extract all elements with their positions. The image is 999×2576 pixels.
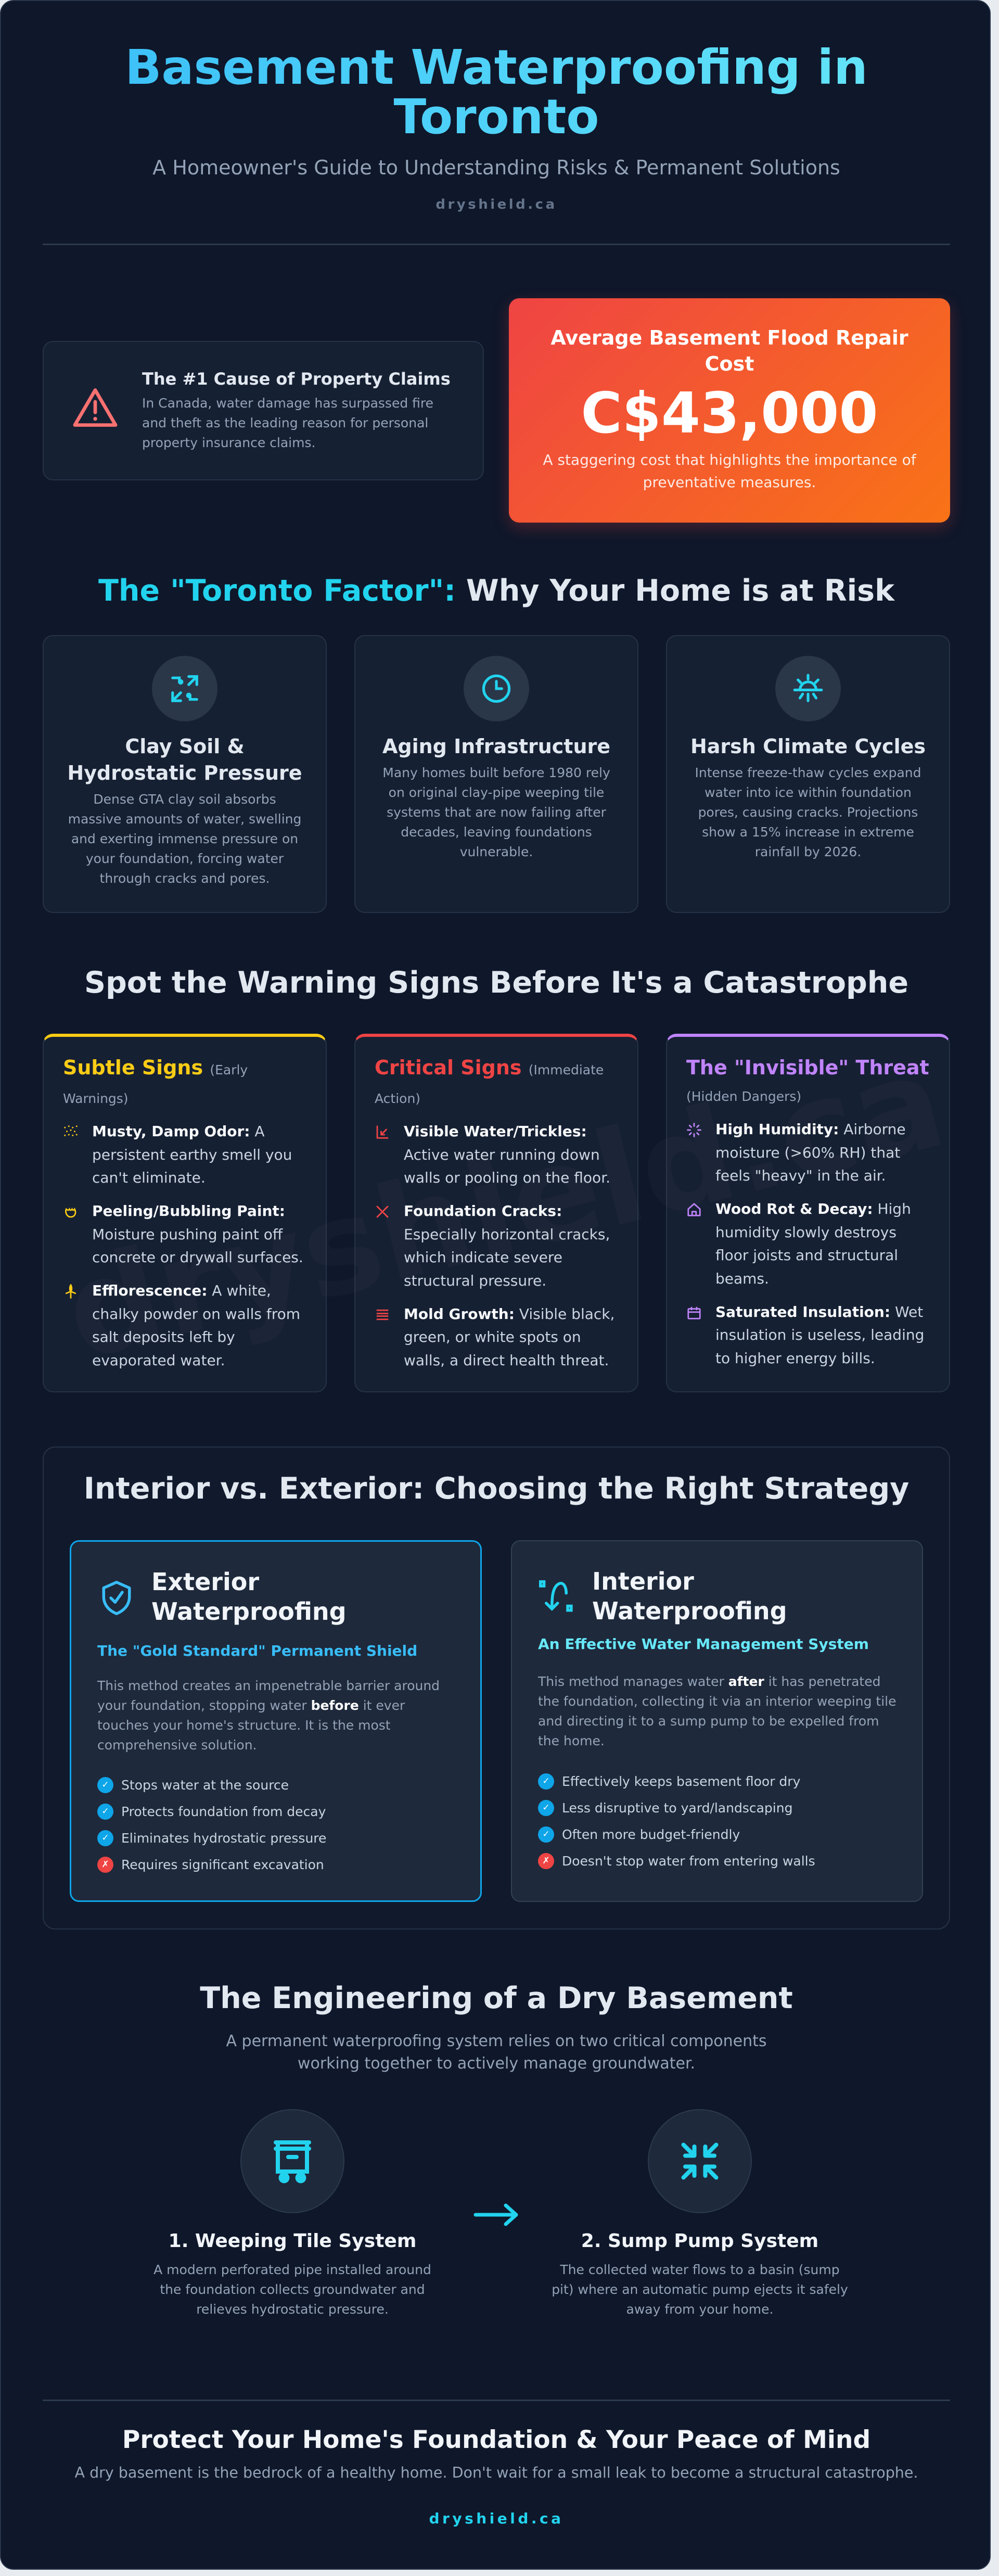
pros/cons list: ✓ bbox=[101, 1780, 109, 1790]
heading: engineering: The Engineering of a Dry Basement bbox=[200, 1981, 793, 2015]
card: exterior: Exterior bbox=[151, 1568, 259, 1596]
pros/cons list: Stops water at the source bbox=[121, 1778, 289, 1793]
card: interior: An Effective Water Management System bbox=[538, 1635, 869, 1653]
pros/cons list bbox=[97, 1777, 326, 1873]
big number: C$43,000 bbox=[581, 381, 878, 446]
panel: invisible threat: High Humidity: Airborne moisture (>60% RH) that feels "heavy" in the air. bbox=[715, 1121, 906, 1184]
pros/cons list: Eliminates hydrostatic pressure bbox=[121, 1831, 326, 1846]
panel: clay soil: Clay Soil & Hydrostatic Pressure bbox=[67, 735, 302, 784]
panel: invisible threat: The "Invisible" Threat bbox=[686, 1056, 929, 1079]
panel: clay soil: Dense GTA clay soil absorbs massive amounts of water, swelling and exerting immense pressure on your foundation, forcing water through cracks and pores. bbox=[68, 792, 301, 886]
footer heading: Protect Your Home's Foundation & Your Peace of Mind bbox=[122, 2426, 870, 2454]
footer brand: dryshield.ca bbox=[429, 2510, 564, 2527]
pros/cons list: ✗ bbox=[101, 1859, 109, 1870]
card: interior: Waterproofing bbox=[592, 1597, 787, 1625]
panel: interior vs exterior bbox=[43, 1446, 950, 1930]
watermark: dryshield.ca bbox=[51, 1025, 958, 1389]
card: interior: Often more budget-friendly bbox=[562, 1827, 740, 1842]
pros/cons list: ✓ bbox=[101, 1806, 109, 1817]
stat text: In Canada, water damage has surpassed fire and theft as the leading reason for personal property insurance claims. bbox=[142, 396, 433, 450]
title: Toronto bbox=[393, 89, 599, 145]
panel: aging infrastructure: Many homes built before 1980 rely on original clay-pipe weeping tile systems that are now failing after decades, leaving foundations vulnerable. bbox=[382, 765, 610, 859]
panel: invisible threat bbox=[666, 1034, 950, 1392]
card: interior: Doesn't stop water from entering walls bbox=[562, 1854, 815, 1869]
arrow bbox=[473, 2204, 518, 2226]
stat card: repair cost: Average Basement Flood Repair Cost bbox=[550, 326, 908, 375]
panel: critical signs: Mold Growth: Visible black, green, or white spots on walls, a direct health threat. bbox=[404, 1305, 614, 1369]
stat card: #1 cause bbox=[43, 341, 484, 480]
card: exterior: This method creates an impenetrable barrier around your foundation, stopping water before it ever touches your home's structure. It is the most comprehensive solution. bbox=[97, 1678, 440, 1753]
panel: subtle signs: Peeling/Bubbling Paint: Moisture pushing paint off concrete or drywall surfaces. bbox=[92, 1202, 303, 1266]
brand: dryshield.ca bbox=[436, 197, 557, 212]
step: sump pump: 2. Sump Pump System bbox=[581, 2230, 818, 2252]
panel: clay soil bbox=[43, 635, 327, 913]
engineering intro: A permanent waterproofing system relies on two critical components working together to actively manage groundwater. bbox=[226, 2032, 767, 2073]
card: interior bbox=[511, 1540, 923, 1902]
pros/cons list: Protects foundation from decay bbox=[121, 1804, 326, 1819]
card: interior: ✓ bbox=[542, 1803, 550, 1813]
panel: invisible threat: Wood Rot & Decay: High humidity slowly destroys floor joists and structural beams. bbox=[715, 1200, 911, 1287]
panel: subtle signs: Efflorescence: A white, chalky powder on walls from salt deposits left by evaporated water. bbox=[92, 1282, 300, 1369]
panel: climate bbox=[666, 635, 950, 913]
card: interior: Less disruptive to yard/landscaping bbox=[562, 1800, 792, 1816]
panel: critical signs: Critical Signs (Immediate Action) bbox=[375, 1056, 604, 1106]
panel: subtle signs bbox=[43, 1034, 327, 1392]
panel: climate: Harsh Climate Cycles bbox=[690, 735, 926, 758]
card: interior: This method manages water after it has penetrated the foundation, collecting it via an interior weeping tile and directing it to a sump pump to be expelled from the home. bbox=[538, 1674, 896, 1748]
step: sump pump: The collected water flows to a basin (sump pit) where an automatic pump ejects it safely away from your home. bbox=[552, 2262, 848, 2317]
step: sump pump bbox=[552, 2109, 848, 2317]
pros/cons list: Requires significant excavation bbox=[121, 1857, 324, 1872]
step: weeping tile: 1. Weeping Tile System bbox=[169, 2230, 416, 2252]
panel: subtle signs: Musty, Damp Odor: A persistent earthy smell you can't eliminate. bbox=[92, 1123, 292, 1186]
card: exterior: The "Gold Standard" Permanent Shield bbox=[97, 1642, 417, 1659]
footer text: A dry basement is the bedrock of a healthy home. Don't wait for a small leak to become a structural catastrophe. bbox=[75, 2464, 918, 2481]
stat card: repair cost: A staggering cost that highlights the importance of preventative measures. bbox=[543, 451, 916, 491]
panel: aging infrastructure bbox=[354, 635, 638, 913]
stat text bbox=[142, 369, 451, 450]
panel: subtle signs: Subtle Signs (Early Warnings) bbox=[63, 1056, 248, 1106]
card: interior: ✗ bbox=[542, 1856, 550, 1866]
stat text: The #1 Cause of Property Claims bbox=[142, 369, 451, 389]
panel: aging infrastructure: Aging Infrastructure bbox=[382, 735, 610, 758]
card: interior: ✓ bbox=[542, 1776, 550, 1786]
step: weeping tile bbox=[153, 2109, 431, 2317]
panel: invisible threat: (Hidden Dangers) bbox=[686, 1089, 801, 1104]
heading: Interior vs. Exterior: Choosing the Right Strategy bbox=[84, 1471, 909, 1506]
stat card: repair cost bbox=[509, 298, 950, 523]
icon: water flow bbox=[539, 1580, 573, 1611]
card: interior: ✓ bbox=[542, 1829, 550, 1839]
title: Basement Waterproofing in bbox=[125, 40, 868, 95]
panel: critical signs: Foundation Cracks: Especially horizontal cracks, which indicate severe structural pressure. bbox=[404, 1202, 610, 1289]
subtitle: A Homeowner's Guide to Understanding Risks & Permanent Solutions bbox=[152, 156, 840, 179]
card: interior: Effectively keeps basement floor dry bbox=[562, 1774, 800, 1789]
title bbox=[22, 43, 971, 142]
step: weeping tile: A modern perforated pipe installed around the foundation collects groundwater and relieves hydrostatic pressure. bbox=[153, 2262, 431, 2317]
icon: shield bbox=[102, 1581, 131, 1615]
card: interior: Interior bbox=[592, 1567, 694, 1595]
panel: critical signs: Visible Water/Trickles: Active water running down walls or pooling on the floor. bbox=[404, 1123, 610, 1186]
heading: toronto factor: The "Toronto Factor": Why Your Home is at Risk bbox=[98, 574, 894, 608]
pros/cons list: ✓ bbox=[101, 1833, 109, 1843]
icon: warning bbox=[73, 388, 118, 427]
panel: invisible threat: Saturated Insulation: Wet insulation is useless, leading to higher energy bills. bbox=[715, 1303, 924, 1367]
panel: critical signs bbox=[354, 1034, 638, 1392]
panel: climate: Intense freeze-thaw cycles expand water into ice within foundation pores, causing cracks. Projections show a 15% increase in extreme rainfall by 2026. bbox=[695, 765, 921, 859]
heading: warning signs: Spot the Warning Signs Before It's a Catastrophe bbox=[84, 966, 908, 1000]
card: exterior bbox=[70, 1540, 482, 1902]
card: exterior: Waterproofing bbox=[151, 1597, 347, 1626]
